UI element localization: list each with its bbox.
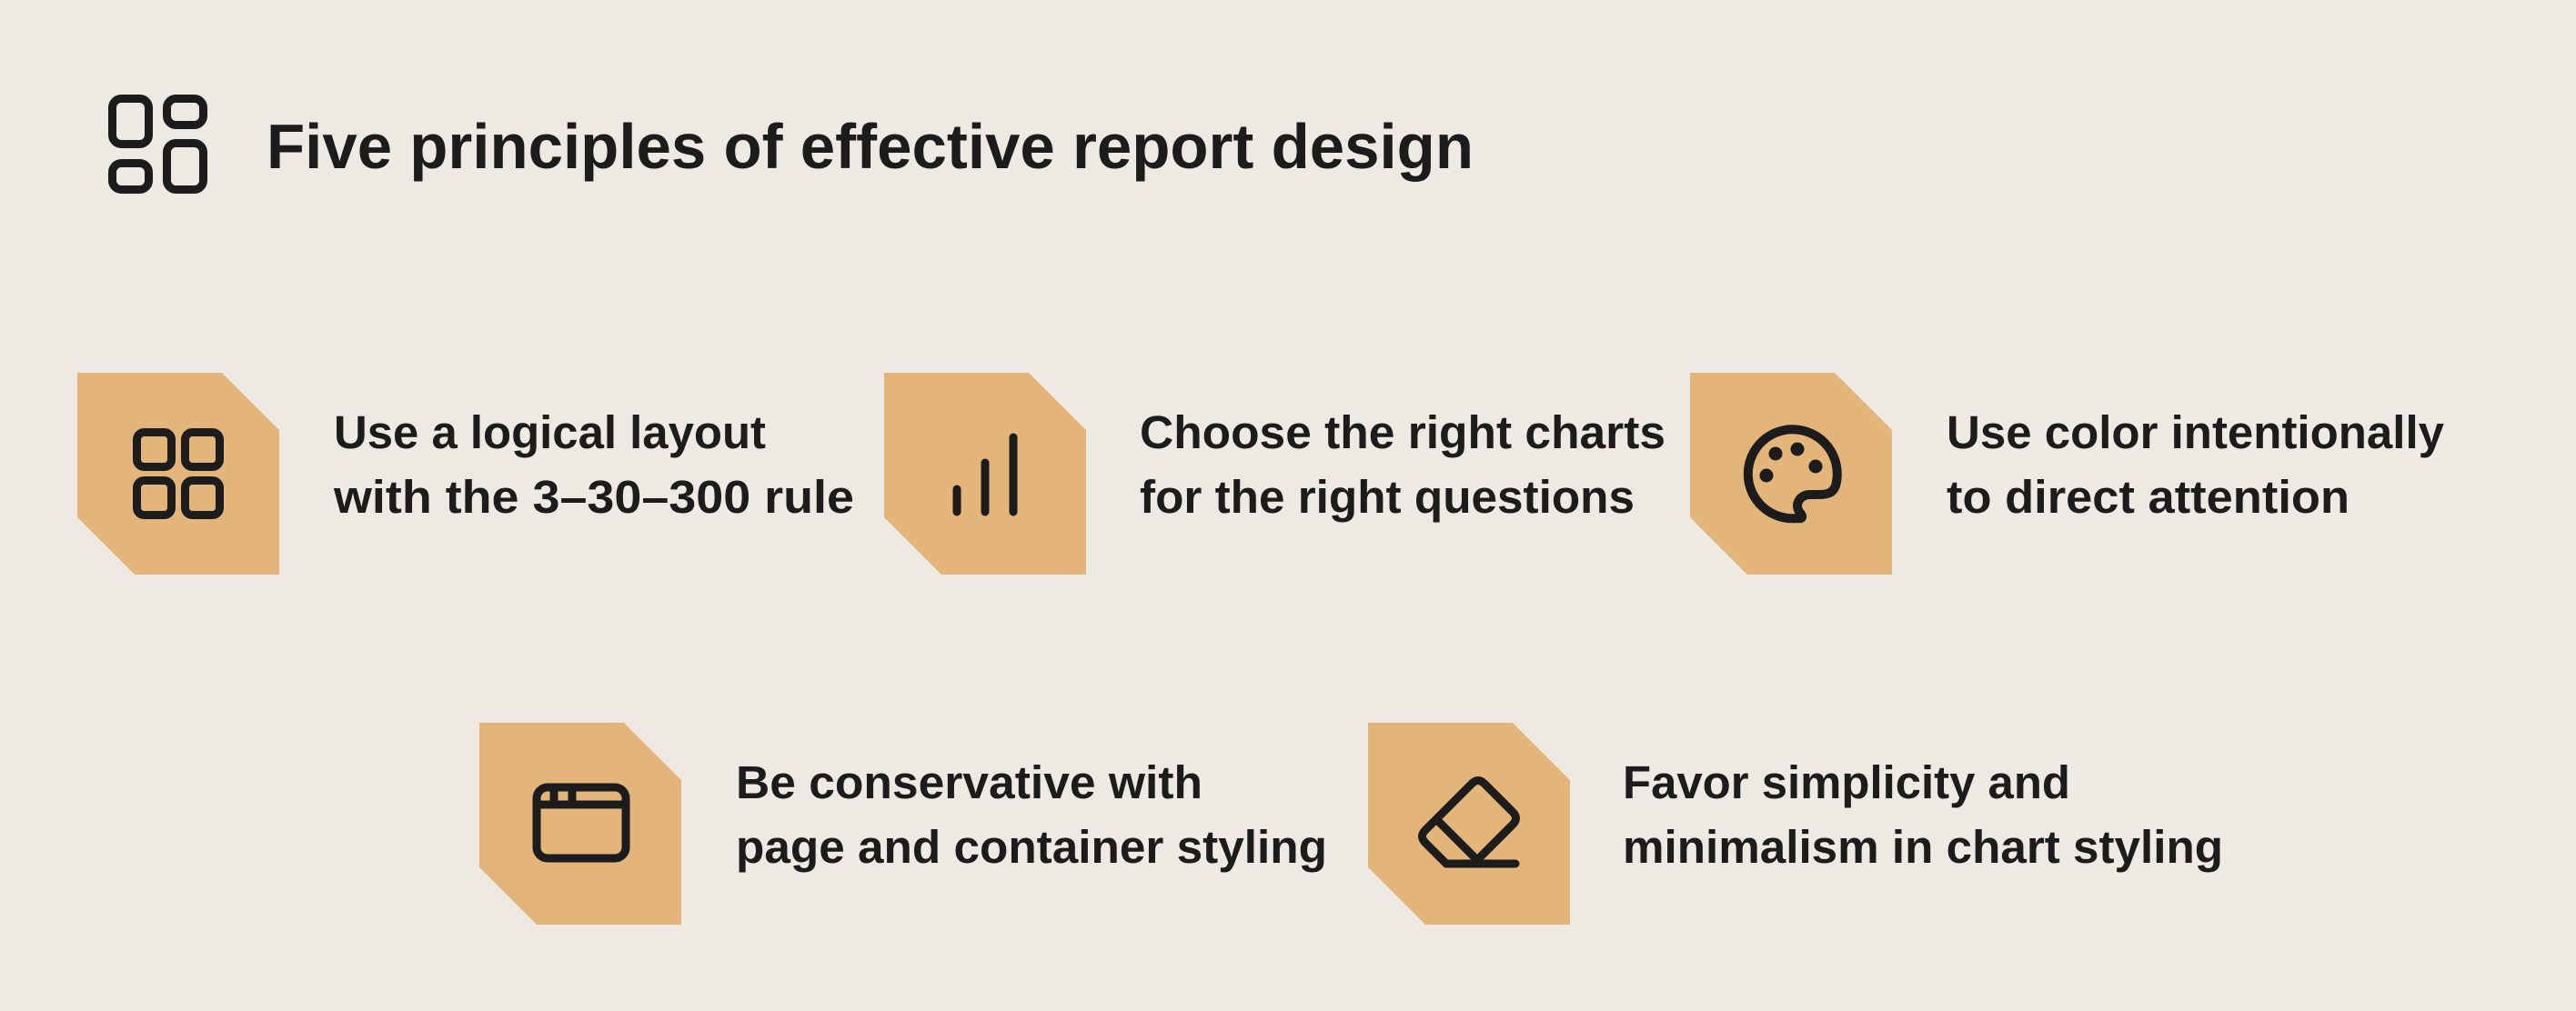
text 1: Use a logical layout [334,406,766,458]
badge 4 [479,723,681,925]
text 3: Use color intentionally [1947,406,2445,458]
card 1: logical layout [77,373,854,575]
card 4: container styling [479,723,1327,925]
icon: palette [1748,429,1837,518]
card 3: color [1690,373,2445,575]
title: Five principles of effective report design [267,111,1474,182]
text 2 [1140,406,1665,523]
card 2: charts [884,373,1665,575]
icon: dashboard layout [113,98,204,189]
text 1: with the 3–30–300 rule [333,471,854,523]
text 2: Choose the right charts [1140,406,1665,458]
text 5: Favor simplicity and [1623,756,2070,808]
text 2: for the right questions [1140,471,1635,523]
text 4 [736,756,1327,873]
card 5: simplicity [1368,723,2223,925]
text 3: to direct attention [1947,471,2350,523]
icon: grid [136,433,220,515]
text 1 [333,406,854,523]
badge 5 [1368,723,1570,925]
icon: eraser [1423,780,1515,864]
badge 3 [1690,373,1892,575]
badge 2 [884,373,1086,575]
text 5: minimalism in chart styling [1623,821,2223,873]
text 4: page and container styling [736,821,1327,873]
text 4: Be conservative with [736,756,1202,808]
badge 1 [77,373,279,575]
text 5 [1623,756,2223,873]
text 3 [1947,406,2445,523]
icon: bar chart [957,437,1013,512]
icon: browser window [537,787,626,858]
header [113,98,1474,189]
